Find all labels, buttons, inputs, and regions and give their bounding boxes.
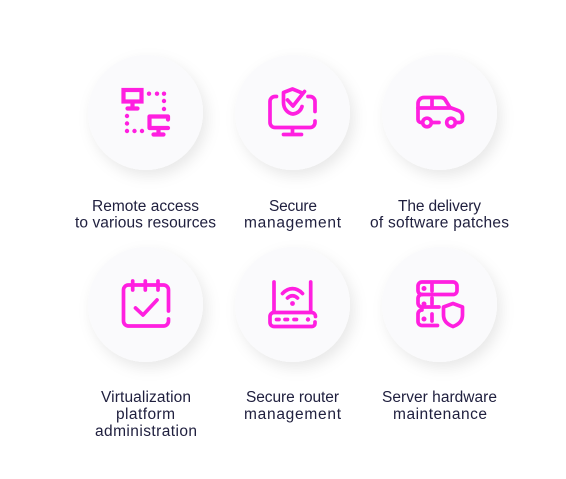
panel: software patches	[370, 55, 509, 232]
label: software patches: of software patches	[370, 214, 509, 232]
label: secure management: Secure	[269, 198, 317, 215]
label: server hardware: Server hardware	[382, 389, 497, 406]
icon: connected computers	[124, 90, 168, 134]
label: remote access: to various resources	[75, 214, 216, 232]
label: router: Secure router	[246, 389, 339, 406]
label: virtualization: administration	[95, 423, 197, 440]
icon: calendar with check	[124, 281, 168, 326]
icon: wifi router	[270, 282, 316, 326]
label: router	[244, 389, 342, 423]
label: secure management	[244, 198, 342, 232]
label: virtualization: platform	[116, 406, 175, 423]
circle: remote access	[88, 55, 203, 170]
panel: secure management	[235, 55, 350, 232]
panel: server hardware	[382, 247, 497, 423]
label: virtualization: Virtualization	[101, 389, 191, 406]
panel: remote access	[75, 55, 216, 232]
panel: router	[235, 247, 350, 423]
circle: router	[235, 247, 350, 362]
label: virtualization	[95, 389, 197, 440]
label: secure management: management	[244, 214, 342, 232]
label: software patches	[370, 198, 509, 232]
circle: software patches	[382, 55, 497, 170]
panel: virtualization	[88, 247, 203, 440]
label: router: management	[244, 406, 342, 423]
icon: monitor with shield	[270, 89, 315, 134]
circle: secure management	[235, 55, 350, 170]
label: remote access	[75, 198, 216, 232]
label: remote access: Remote access	[92, 198, 199, 215]
circle: virtualization	[88, 247, 203, 362]
label: server hardware	[382, 389, 497, 423]
label: software patches: The delivery	[398, 198, 481, 215]
icon: server with shield	[418, 282, 462, 326]
circle: server hardware	[382, 247, 497, 362]
label: server hardware: maintenance	[393, 406, 487, 423]
icon: car	[418, 98, 463, 127]
